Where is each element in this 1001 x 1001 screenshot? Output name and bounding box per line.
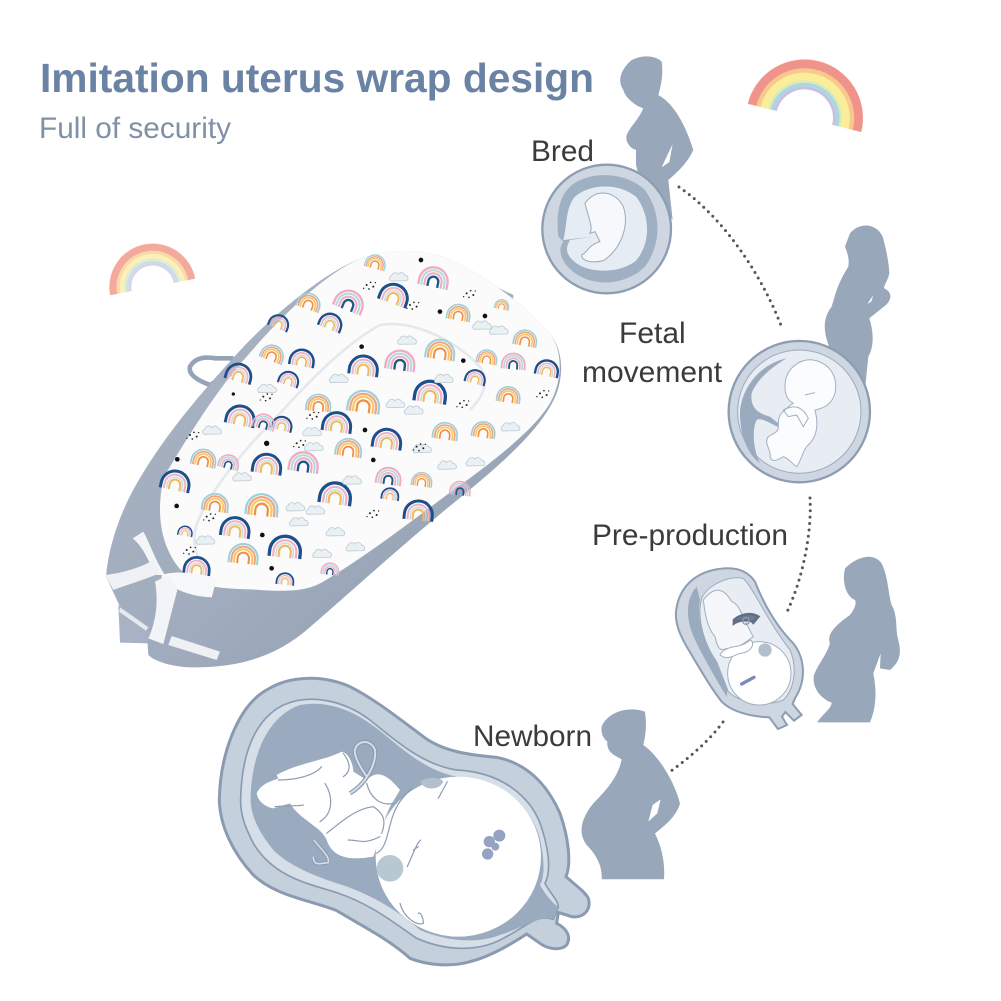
label: Fetal movement: movement xyxy=(582,356,723,389)
nest outer shell xyxy=(106,251,561,667)
label: Bred: Bred xyxy=(531,135,594,168)
silhouette: woman four xyxy=(582,709,680,879)
inner cavity xyxy=(738,350,861,473)
label: Fetal movement: Fetal xyxy=(619,317,686,350)
bow left tail xyxy=(105,560,159,590)
fabric pattern: rainbows xyxy=(160,253,560,586)
fetus body and head xyxy=(703,590,753,650)
label: Pre-production: Pre-production xyxy=(592,519,788,552)
white gap in silhouette one xyxy=(662,144,673,167)
embryo xyxy=(582,193,625,262)
amniotic cavity xyxy=(700,578,794,703)
nest white inner lining xyxy=(160,251,560,591)
silhouette: woman three xyxy=(814,557,900,722)
white gap in silhouette two xyxy=(867,295,873,304)
label: Newborn: Newborn xyxy=(473,720,592,753)
umbilical loop xyxy=(350,742,375,793)
amniotic sac xyxy=(563,186,647,271)
subtitle: Full of security xyxy=(39,112,231,145)
baby head xyxy=(376,777,541,937)
bow lower tail xyxy=(148,575,177,644)
head spots xyxy=(377,855,403,882)
dotted connector: pre-production to newborn xyxy=(671,722,723,771)
panel: fetal movement uterus diagram xyxy=(729,341,870,482)
baby body xyxy=(257,752,400,858)
dotted connector: bred to fetal movement xyxy=(679,187,782,328)
knee xyxy=(720,640,753,658)
dark inner layer xyxy=(558,175,657,282)
inner bolster shading xyxy=(194,324,485,573)
baby limb creases xyxy=(275,753,447,924)
thin inner wall line xyxy=(241,699,558,948)
ear xyxy=(482,830,505,860)
silhouette: woman two xyxy=(825,226,890,390)
fabric pattern: clouds xyxy=(196,273,520,558)
silhouette: woman one xyxy=(620,56,693,220)
cord dark swirl xyxy=(734,614,758,624)
handle: left loop xyxy=(190,358,237,385)
panel: baby nest product xyxy=(106,251,561,667)
dark amniotic cavity xyxy=(251,704,558,940)
fetus xyxy=(767,360,836,467)
corner flap xyxy=(118,605,150,643)
handle: top tab xyxy=(475,277,513,305)
panel: pre-production uterus diagram xyxy=(676,568,803,729)
flap shine xyxy=(119,607,148,631)
dark placenta xyxy=(740,358,787,463)
icon: large watercolor rainbow xyxy=(752,52,870,131)
bow right loop xyxy=(162,573,217,597)
umbilical tail xyxy=(313,840,329,864)
dotted connector: fetal movement to pre-production xyxy=(787,498,810,612)
fabric pattern: black stars and dots xyxy=(174,258,549,571)
bow upper loop xyxy=(133,532,165,575)
title: Imitation uterus wrap design xyxy=(40,55,594,101)
spots xyxy=(758,643,772,657)
tag on shell xyxy=(168,636,220,660)
icon: small watercolor rainbow xyxy=(106,240,192,295)
panel: newborn uterus diagram xyxy=(219,678,589,965)
white gap in silhouette four xyxy=(648,799,661,822)
white ribbon bow and tag xyxy=(105,532,220,660)
panel: bred uterus diagram xyxy=(542,165,671,293)
dark uterine layer xyxy=(688,587,732,697)
